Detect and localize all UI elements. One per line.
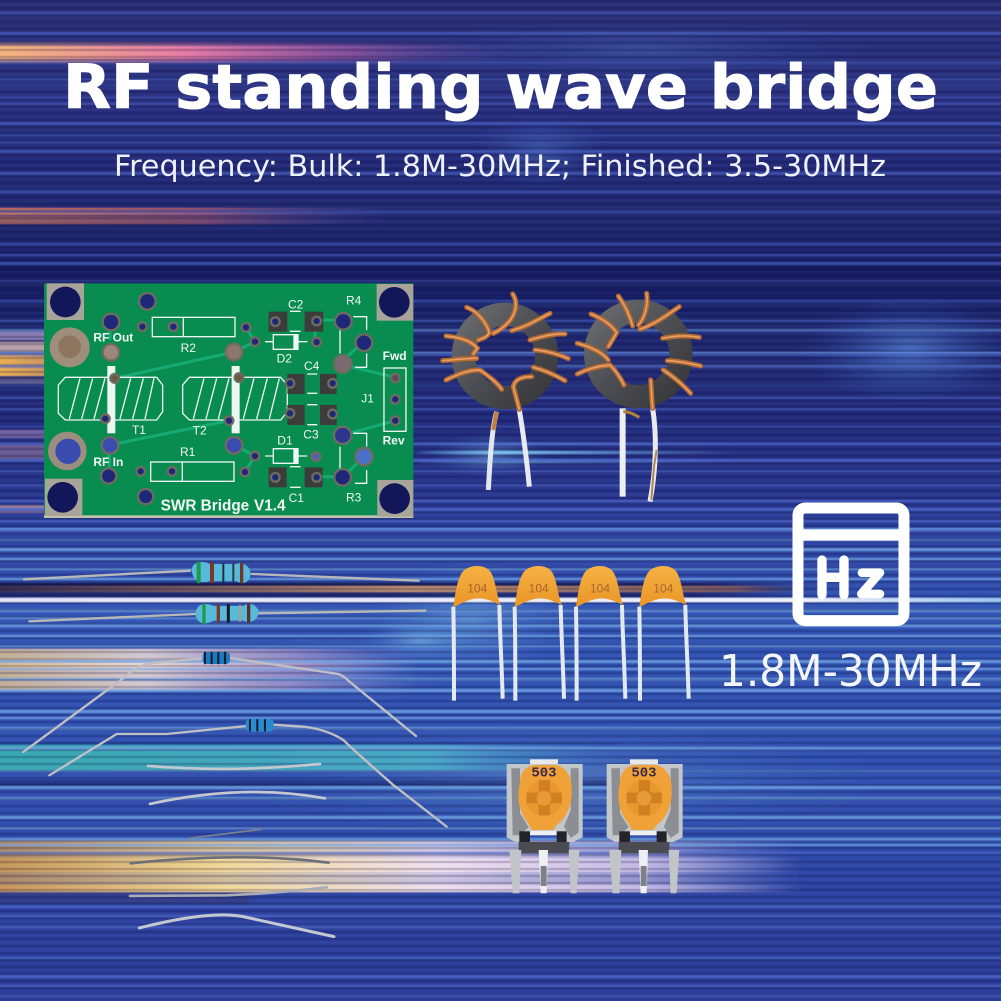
pcb labels: C3 — [303, 428, 319, 442]
pcb large pads — [50, 327, 90, 367]
PCB: SWR bridge board — [44, 283, 413, 518]
pcb traces — [109, 320, 395, 477]
trimmer potentiometers 503 — [507, 759, 683, 893]
pcb labels: V1.4 — [254, 498, 286, 515]
pcb labels: R2 — [181, 341, 196, 355]
pcb corner pads — [45, 283, 413, 517]
ceramic capacitors 104 — [453, 566, 689, 701]
pcb labels: C1 — [289, 491, 304, 505]
pcb labels: R3 — [346, 490, 362, 504]
pcb labels: D2 — [277, 352, 292, 366]
toroid inductors — [443, 293, 701, 502]
pcb labels: R1 — [180, 445, 196, 459]
pcb labels: J1 — [361, 392, 374, 406]
pcb labels: T2 — [193, 424, 207, 438]
toroid left — [443, 294, 568, 490]
subtitle: frequency: Frequency: Bulk: 1.8M-30MHz; Finished: 3.5-30MHz — [114, 149, 886, 183]
pcb labels: SWR Bridge — [161, 498, 249, 515]
resistor 1 — [24, 562, 419, 583]
pcb labels: RF Out — [93, 330, 133, 344]
pcb labels — [93, 294, 407, 515]
pcb labels: C4 — [304, 359, 320, 373]
pcb silkscreen — [58, 311, 406, 487]
label: frequency range: 1.8M-30MHz — [719, 646, 982, 697]
pcb smd pads — [269, 312, 337, 487]
resistor 3 — [23, 652, 416, 752]
pcb labels: C2 — [288, 298, 304, 312]
pcb labels: Rev — [383, 434, 405, 448]
resistor 2 — [29, 604, 425, 623]
title: RF standing wave bridge — [63, 52, 938, 123]
pcb labels: R4 — [346, 294, 362, 308]
pcb through holes — [101, 293, 400, 504]
pcb labels: T1 — [132, 423, 146, 437]
resistors and wire leads — [23, 562, 447, 937]
bare wire leads — [130, 764, 334, 937]
resistor 4 — [49, 719, 447, 827]
pcb labels: RF In — [93, 455, 123, 469]
icon: Hz frequency window — [798, 508, 904, 621]
toroid right — [577, 293, 701, 502]
pcb labels: Fwd — [383, 349, 407, 363]
pcb labels: D1 — [277, 434, 293, 448]
